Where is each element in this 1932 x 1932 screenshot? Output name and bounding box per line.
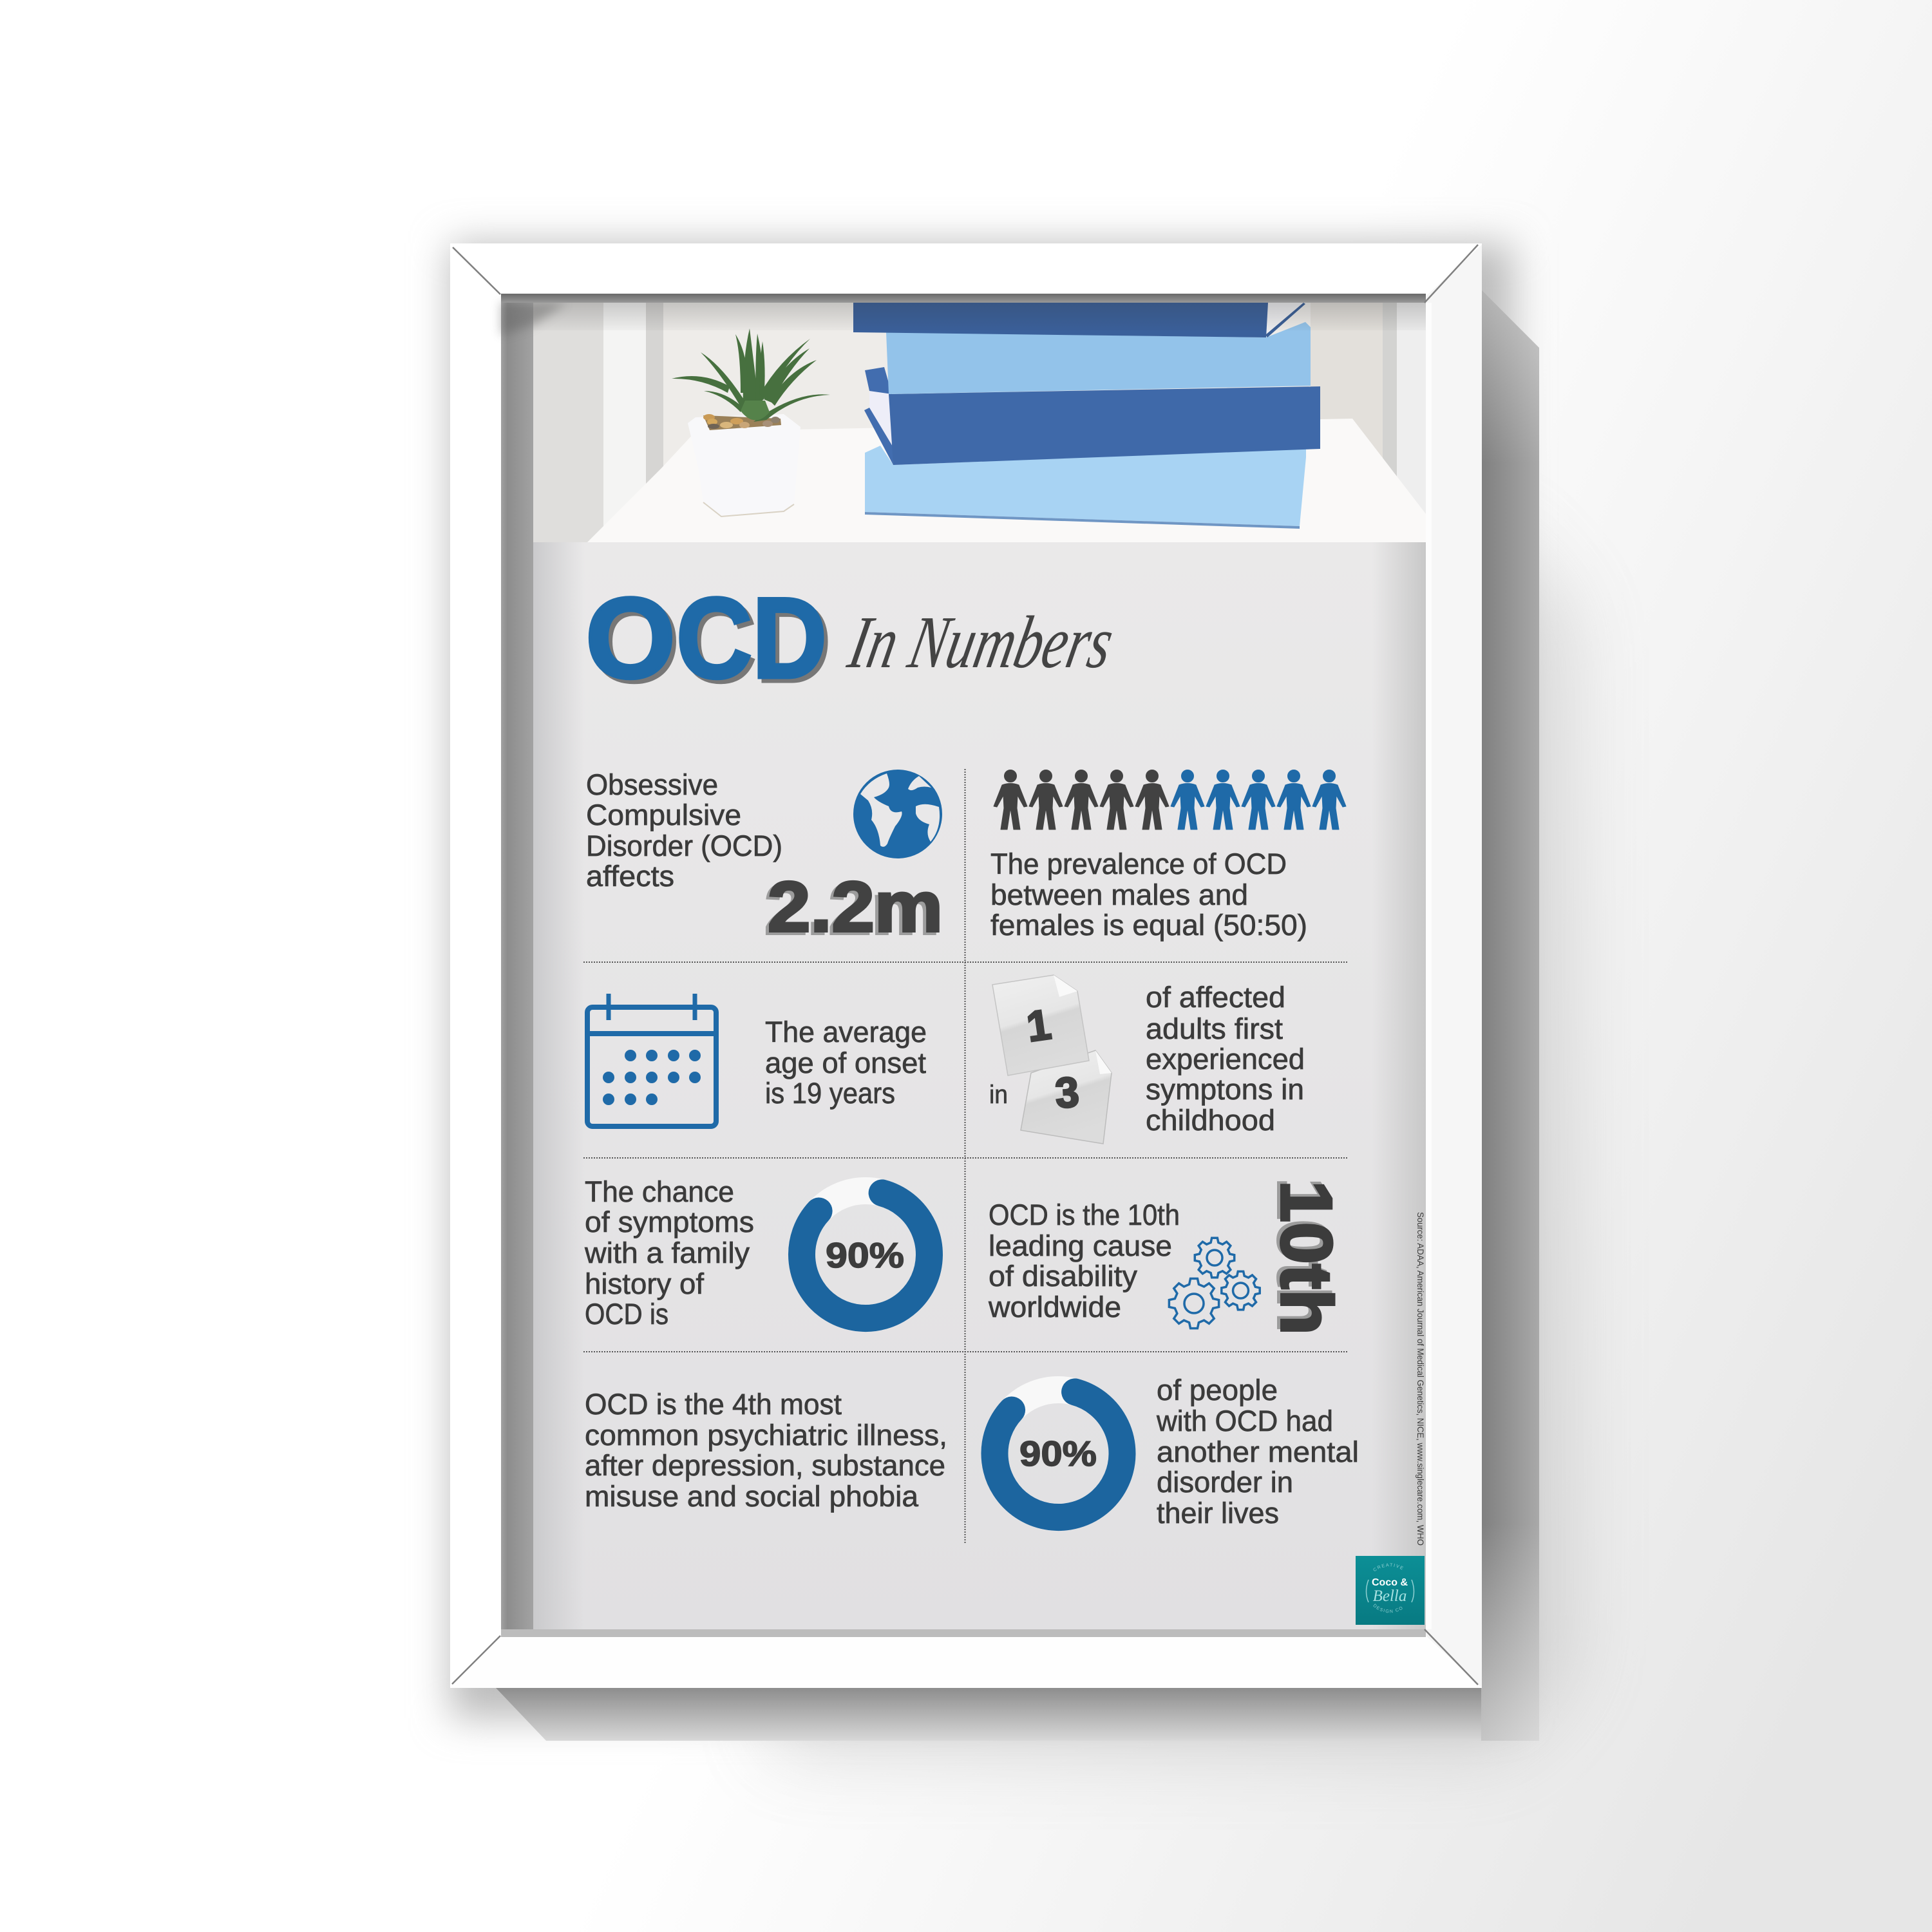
- logo: CREATIVE: [1373, 1564, 1404, 1571]
- text: family history: history of: [585, 1267, 704, 1300]
- pebbles: [703, 414, 781, 430]
- title: [585, 574, 1121, 706]
- text: family history: The chance: [585, 1175, 734, 1208]
- source note: Source: ADAA, American Journal of Medical Genetics, NICE, www.singlecare.com, WHO: [1416, 1212, 1426, 1546]
- text: leading cause: of disability: [989, 1260, 1138, 1293]
- text: adults in childhood: [1146, 981, 1305, 1137]
- text: adults in childhood: adults first: [1146, 1012, 1283, 1045]
- icon: 1 in 3 papers: [989, 975, 1112, 1144]
- icon: 1 in 3 papers: 1: [1024, 1000, 1054, 1050]
- text: OCD affects: affects: [586, 860, 674, 893]
- In Numbers script: In Numbers: [842, 601, 1121, 684]
- OCD wordmark: C: [680, 578, 756, 706]
- inner shadows: [501, 294, 1426, 1637]
- OCD wordmark: D: [756, 578, 831, 706]
- aloe leaves: [672, 328, 830, 422]
- poster frame: [450, 243, 1482, 1688]
- text: adults in childhood: of affected: [1146, 981, 1285, 1014]
- text: mental disorder: [1156, 1374, 1359, 1530]
- stat: 2.2m: 2.2m: [764, 870, 940, 949]
- OCD wordmark: O: [589, 578, 679, 706]
- stat: 10th rotated: 10th: [1266, 1180, 1347, 1335]
- panel: prevalence: [990, 770, 1346, 942]
- panel: another mental disorder: [994, 1374, 1359, 1530]
- text: mental disorder: with OCD had: [1156, 1405, 1333, 1437]
- panel: 1 in 3: [989, 975, 1305, 1144]
- stat: 10th rotated: 10th: [1263, 1178, 1343, 1332]
- panel: 4th most common: misuse and social phobia: [585, 1480, 919, 1513]
- text: adults in childhood: symptons in: [1146, 1073, 1304, 1106]
- text: OCD affects: Compulsive: [586, 799, 741, 831]
- text: family history: with a family: [584, 1236, 750, 1269]
- text: prevalence: between males and: [990, 878, 1248, 911]
- donut chart: 90%: [802, 1191, 929, 1318]
- text: prevalence: [990, 848, 1307, 942]
- icon: gears: [1169, 1238, 1260, 1329]
- logo: DESIGN CO: [1373, 1604, 1403, 1613]
- text: prevalence: The prevalence of OCD: [990, 848, 1287, 880]
- text: adults in childhood: experienced: [1146, 1043, 1305, 1075]
- stat: 2.2m: 2.2m: [768, 867, 943, 947]
- frame top and bottom rails: [452, 243, 1481, 1688]
- panel: family history: [584, 1175, 929, 1331]
- text: mental disorder: their lives: [1157, 1497, 1279, 1530]
- text: family history: [584, 1175, 754, 1331]
- OCD wordmark: O: [585, 574, 676, 702]
- panel: 4th most common: OCD is the 4th most: [585, 1388, 842, 1421]
- logo: Coco &: [1372, 1577, 1408, 1588]
- icon: 1 in 3 papers: 3: [1054, 1068, 1081, 1117]
- poster paper: [495, 294, 1426, 1637]
- text: OCD affects: [586, 768, 782, 893]
- OCD wordmark: D: [752, 574, 827, 702]
- text: leading cause: leading cause: [989, 1229, 1172, 1262]
- panel: average age: [587, 994, 927, 1126]
- text: average age: The average: [765, 1016, 927, 1048]
- frame sides: [450, 243, 1482, 1688]
- icon: row of people: [994, 770, 1346, 829]
- text: mental disorder: disorder in: [1157, 1466, 1293, 1499]
- text: leading cause: worldwide: [988, 1291, 1121, 1323]
- icon: calendar: [587, 994, 716, 1126]
- text: OCD affects: Obsessive: [586, 768, 718, 801]
- OCD wordmark: [585, 574, 831, 706]
- frame shadow: [450, 243, 1571, 1752]
- text: family history: of symptoms: [585, 1206, 754, 1238]
- text: leading cause: [988, 1198, 1180, 1323]
- books: [853, 303, 1320, 529]
- text: adults in childhood: childhood: [1146, 1104, 1275, 1137]
- panel: 4th most common: after depression, substance: [585, 1449, 945, 1482]
- text: OCD affects: Disorder (OCD): [586, 829, 782, 862]
- logo: Bella: [1373, 1587, 1406, 1605]
- photo: shelf with plant and books: [533, 303, 1426, 542]
- grid dividers: [583, 769, 1347, 1544]
- donut chart: 90%: 90%: [1019, 1434, 1097, 1473]
- panel: 2.2m affected: [586, 768, 943, 949]
- plant in white pot: [672, 328, 830, 516]
- icon: 1 in 3 papers: in: [989, 1081, 1008, 1109]
- text: average age: age of onset: [765, 1046, 926, 1079]
- text: average age: is 19 years: [765, 1077, 895, 1110]
- text: prevalence: females is equal (50:50): [990, 909, 1307, 942]
- icon: globe: [853, 770, 942, 858]
- text: average age: [765, 1016, 927, 1110]
- panel: 10th leading cause: [988, 1178, 1347, 1335]
- donut chart: 90%: [994, 1390, 1122, 1517]
- text: leading cause: OCD is the 10th: [989, 1198, 1180, 1231]
- text: mental disorder: another mental: [1157, 1435, 1359, 1468]
- text: mental disorder: of people: [1157, 1374, 1278, 1406]
- text: family history: OCD is: [585, 1298, 668, 1331]
- logo: [1356, 1556, 1425, 1625]
- panel: 4th most common: common psychiatric illness,: [585, 1419, 947, 1452]
- panel: 4th most common: [585, 1388, 947, 1513]
- OCD wordmark: C: [676, 574, 752, 702]
- donut chart: 90%: 90%: [826, 1235, 904, 1275]
